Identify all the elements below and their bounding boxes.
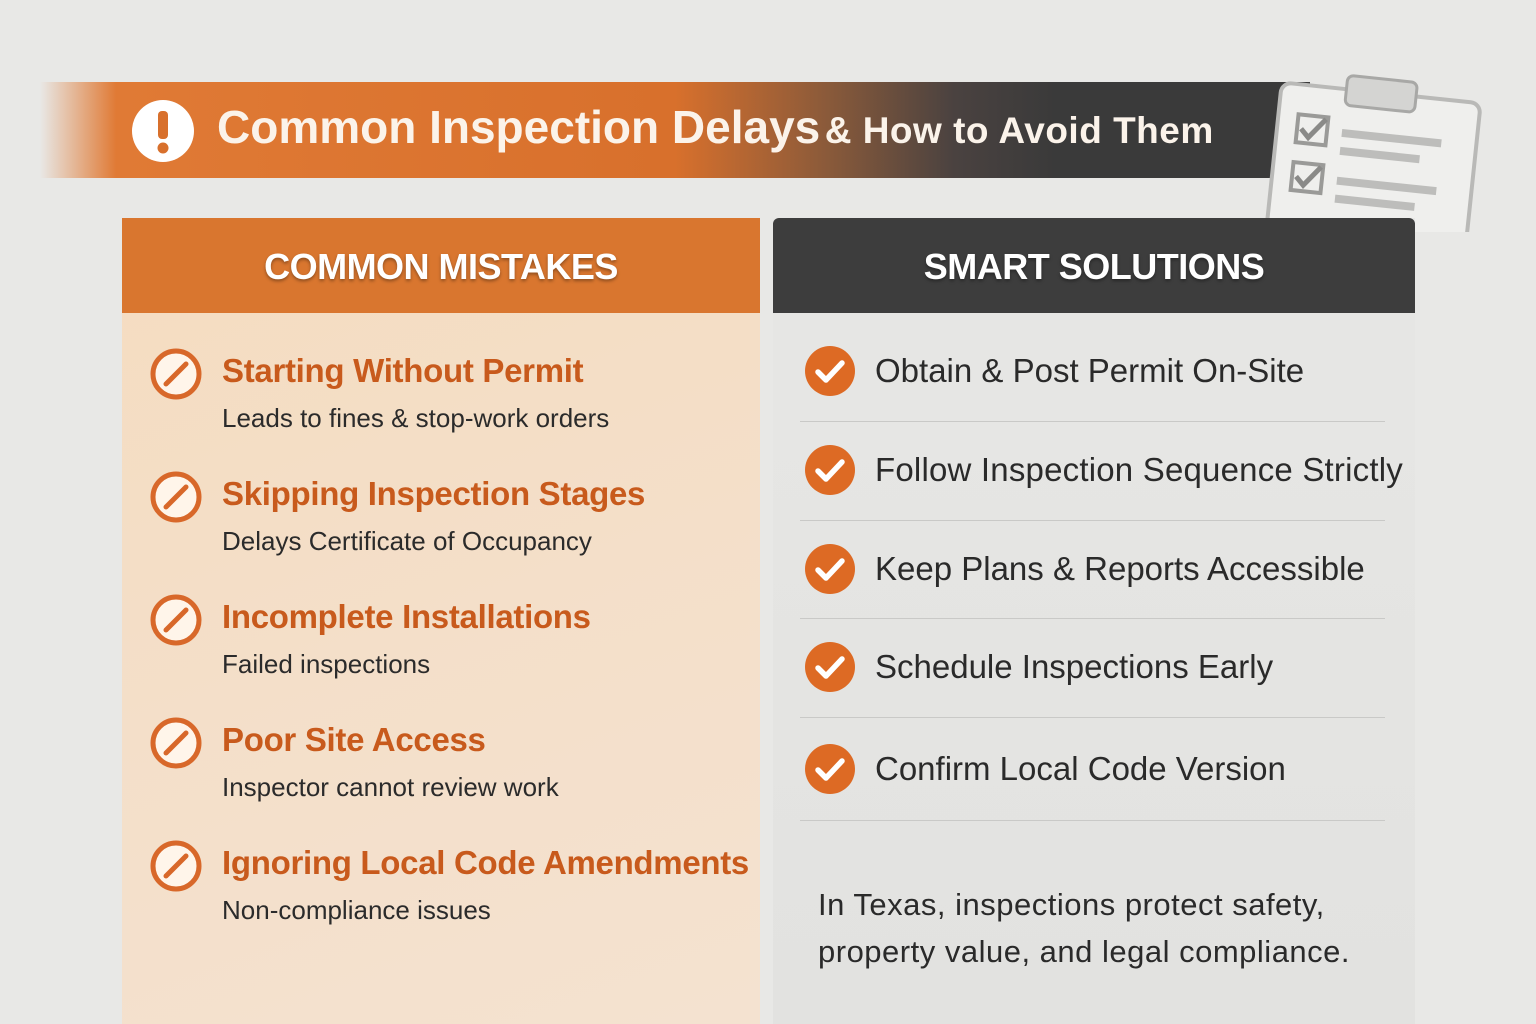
mistake 3: Failed inspections: [222, 649, 430, 679]
closing note: [818, 887, 1350, 969]
solution 1: [805, 346, 1304, 396]
icon: warning: [132, 100, 194, 162]
solution 4: [805, 642, 1273, 692]
mistake 5: Ignoring Local Code Amendments: [222, 844, 749, 881]
title: Common Inspection Delays & How to Avoid Them: [217, 101, 1214, 153]
mistake 2: [150, 472, 645, 556]
mistake 3: [150, 594, 591, 679]
mistake 1: Starting Without Permit: [222, 352, 583, 389]
panel: common mistakes: [122, 218, 760, 1024]
icon: clipboard: [1266, 74, 1482, 232]
mistake 1: [150, 348, 609, 433]
mistake 4: Poor Site Access: [222, 721, 486, 758]
mistake 3: Incomplete Installations: [222, 598, 591, 635]
solution 3: Keep Plans & Reports Accessible: [875, 550, 1365, 587]
solution 5: [805, 744, 1286, 794]
heading: common mistakes: COMMON MISTAKES: [264, 246, 618, 287]
mistake 5: [150, 840, 749, 925]
title band: [40, 82, 1310, 178]
mistake 2: Skipping Inspection Stages: [222, 475, 645, 512]
solution 2: [805, 445, 1403, 495]
solution 1: Obtain & Post Permit On-Site: [875, 352, 1304, 389]
solution 4: Schedule Inspections Early: [875, 648, 1273, 685]
mistake 4: [150, 718, 559, 802]
closing note: property value, and legal compliance.: [818, 934, 1350, 969]
solution 5: Confirm Local Code Version: [875, 750, 1286, 787]
solution 2: Follow Inspection Sequence Strictly: [875, 451, 1403, 488]
heading: smart solutions: SMART SOLUTIONS: [924, 246, 1264, 287]
heading: common mistakes: [122, 218, 760, 313]
mistake 5: Non-compliance issues: [222, 895, 491, 925]
mistake 2: Delays Certificate of Occupancy: [222, 526, 592, 556]
solution 3: [805, 544, 1365, 594]
mistake 1: Leads to fines & stop-work orders: [222, 403, 609, 433]
closing note: In Texas, inspections protect safety,: [818, 887, 1325, 922]
mistake 4: Inspector cannot review work: [222, 772, 559, 802]
heading: smart solutions: [773, 218, 1415, 313]
panel: smart solutions: [773, 218, 1415, 1024]
